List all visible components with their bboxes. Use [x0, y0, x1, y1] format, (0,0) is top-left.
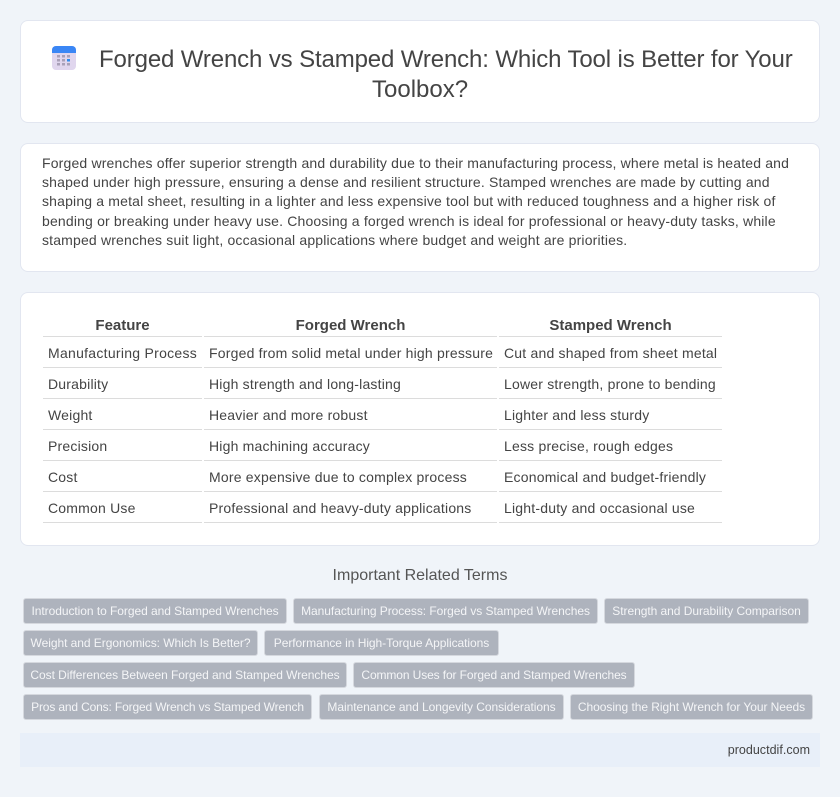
icon: calendar app	[52, 46, 76, 70]
panel: header	[20, 20, 820, 123]
row: common use	[48, 500, 695, 516]
row: manufacturing process: Manufacturing Process	[48, 345, 197, 361]
tag: Pros and Cons: Forged Wrench vs Stamped Wrench	[31, 700, 304, 714]
row: cost	[48, 469, 706, 485]
title	[99, 46, 793, 103]
row: cost: Economical and budget-friendly	[504, 469, 706, 485]
tag: Weight and Ergonomics: Which Is Better?	[31, 636, 250, 650]
tag: Performance in High-Torque Applications	[274, 636, 489, 650]
panel: comparison table	[20, 292, 820, 546]
text block: intro paragraph	[42, 155, 789, 248]
table header: Forged Wrench	[296, 317, 405, 334]
row: manufacturing process: Cut and shaped from sheet metal	[504, 345, 717, 361]
tag	[570, 694, 813, 720]
row: weight	[48, 407, 650, 423]
heading: related terms: Important Related Terms	[333, 567, 507, 584]
row: common use: Light-duty and occasional use	[504, 500, 695, 516]
tag	[319, 694, 564, 720]
text block: intro paragraph: shaped under high pressure, ensuring a dense and resilient structure. Stamped wrenches are made by cutting and	[42, 174, 770, 190]
row: weight: Heavier and more robust	[209, 407, 368, 423]
text block: intro paragraph: shaping a metal sheet, resulting in a lighter and less expensive tool but with reduced toughness and a higher risk of	[42, 193, 776, 209]
tag: Common Uses for Forged and Stamped Wrenches	[361, 668, 627, 682]
row: precision	[48, 438, 673, 454]
title: Forged Wrench vs Stamped Wrench: Which Tool is Better for Your	[99, 46, 793, 73]
row: durability: High strength and long-lasting	[209, 376, 401, 392]
row: precision: Less precise, rough edges	[504, 438, 673, 454]
tag	[293, 598, 598, 624]
row: manufacturing process: Forged from solid metal under high pressure	[209, 345, 493, 361]
tag: Manufacturing Process: Forged vs Stamped Wrenches	[301, 604, 590, 618]
footer	[20, 733, 820, 767]
tag group: related terms	[23, 598, 813, 720]
row: durability	[48, 376, 716, 392]
text block: intro paragraph: stamped wrenches suit light, occasional applications where budget and weight are priorities.	[42, 232, 627, 248]
tag	[23, 598, 287, 624]
row: cost: Cost	[48, 469, 78, 485]
row: weight: Weight	[48, 407, 93, 423]
tag: Cost Differences Between Forged and Stamped Wrenches	[30, 668, 340, 682]
tag	[604, 598, 809, 624]
text block: intro paragraph: bending or breaking under heavy use. Choosing a forged wrench is ideal for professional or heavy-duty tasks, while	[42, 213, 776, 229]
row: durability: Durability	[48, 376, 108, 392]
table header: Feature	[95, 317, 150, 334]
tag: Choosing the Right Wrench for Your Needs	[578, 700, 805, 714]
footer source text: productdif.com	[728, 743, 810, 757]
row: precision: High machining accuracy	[209, 438, 370, 454]
row: cost: More expensive due to complex process	[209, 469, 467, 485]
tag	[23, 694, 312, 720]
tag: Maintenance and Longevity Considerations	[327, 700, 556, 714]
row: manufacturing process	[48, 345, 717, 361]
row: weight: Lighter and less sturdy	[504, 407, 649, 423]
row: common use: Professional and heavy-duty applications	[209, 500, 472, 516]
tag: Strength and Durability Comparison	[612, 604, 801, 618]
tag	[23, 630, 258, 656]
row: precision: Precision	[48, 438, 107, 454]
tag	[23, 662, 347, 688]
tag	[264, 630, 499, 656]
title: Toolbox?	[372, 76, 468, 103]
tag	[353, 662, 635, 688]
table header: Stamped Wrench	[549, 317, 672, 334]
text block: intro paragraph: Forged wrenches offer superior strength and durability due to their manufacturing process, where metal is heated and	[42, 155, 789, 171]
row: common use: Common Use	[48, 500, 136, 516]
table header	[95, 317, 672, 334]
panel: intro text	[20, 143, 820, 272]
row: durability: Lower strength, prone to bending	[504, 376, 716, 392]
tag: Introduction to Forged and Stamped Wrenches	[31, 604, 279, 618]
